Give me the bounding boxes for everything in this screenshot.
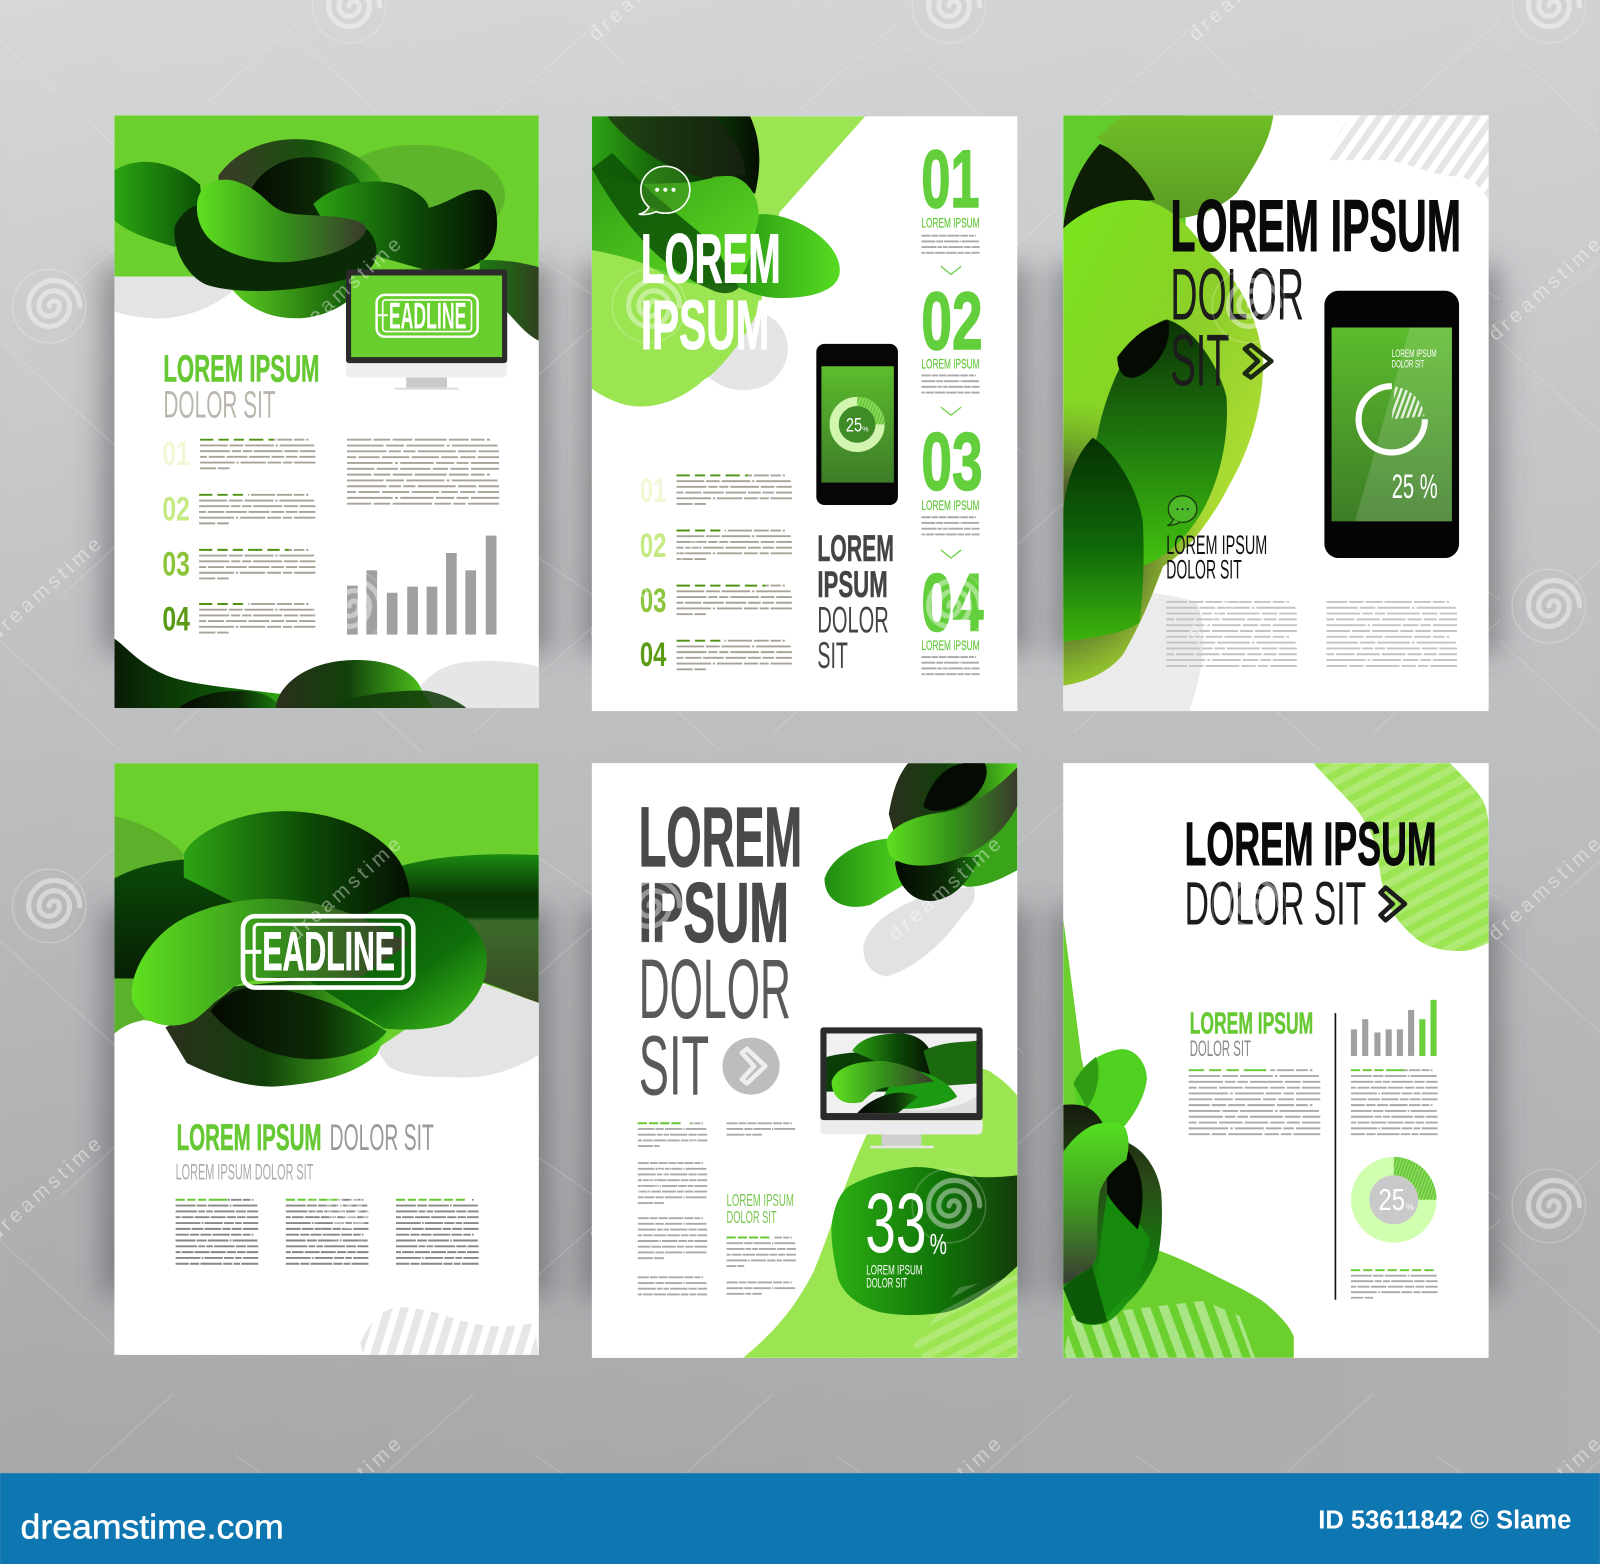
side heading: LOREM [817, 528, 894, 569]
phone with donut [816, 344, 898, 505]
numbered list: 04 [640, 636, 667, 674]
stat 33%: DOLOR SIT [866, 1276, 907, 1292]
heading: SIT [1170, 320, 1230, 402]
panel: brochure 2 top middle [592, 116, 1017, 711]
heading [639, 789, 802, 1113]
side heading: IPSUM [817, 564, 888, 605]
subheading and text: LOREM IPSUM [1190, 1006, 1313, 1040]
phone with donut: % [862, 426, 869, 434]
heading: SIT [639, 1018, 709, 1113]
numbered steps column: LOREM IPSUM [921, 356, 980, 372]
numbered list [162, 435, 315, 638]
side heading: DOLOR [817, 600, 889, 641]
panel: brochure 4 bottom left [114, 763, 539, 1355]
watermark: dreamstime [885, 833, 1005, 945]
panel: brochure 1 top left [114, 115, 539, 708]
panel: brochure 3 top right [1063, 115, 1489, 711]
numbered steps column: 03 [921, 417, 983, 508]
watermark: dreamstime [285, 234, 406, 345]
heading: DOLOR SIT [163, 383, 276, 425]
subheading: LOREM IPSUM [727, 1190, 794, 1210]
heading: LOREM [641, 220, 781, 298]
icon: arrow circle [722, 1038, 780, 1095]
three text columns [176, 1200, 479, 1264]
divider [1335, 1013, 1336, 1300]
numbered steps column: LOREM IPSUM [921, 216, 980, 232]
footer bar [0, 1473, 1600, 1564]
headline badge [377, 295, 478, 337]
phone with donut: 25 [846, 415, 862, 437]
numbered steps column [921, 134, 984, 674]
numbered list [640, 472, 792, 674]
numbered list: 01 [162, 435, 190, 473]
subheading and text: DOLOR SIT [1190, 1036, 1251, 1061]
numbered steps column: 02 [921, 276, 983, 367]
headline badge: EADLINE [389, 296, 466, 337]
side heading: SIT [817, 635, 848, 676]
text block [347, 440, 499, 504]
heading: DOLOR [639, 941, 791, 1036]
heading: LOREM IPSUM [177, 1117, 322, 1158]
numbered list: 03 [162, 545, 190, 583]
organic green artwork [114, 115, 539, 341]
heading [176, 1117, 434, 1184]
text columns [638, 1123, 796, 1294]
organic green artwork [592, 116, 865, 407]
text block [1351, 1070, 1438, 1134]
heading [163, 348, 319, 425]
heading: DOLOR SIT [1185, 869, 1366, 937]
footer credit: ID 53611842 © Slame [1318, 1506, 1571, 1534]
monitor with artwork [820, 1027, 983, 1148]
speech bubble and caption: DOLOR SIT [1166, 554, 1242, 584]
side heading [817, 528, 894, 676]
stat 33%: 33 [865, 1175, 927, 1270]
speech bubble and caption [1166, 496, 1267, 584]
donut chart: 25 [1378, 1183, 1405, 1217]
headline badge [243, 916, 413, 988]
organic green artwork [743, 763, 1017, 1358]
organic green artwork [114, 763, 539, 1087]
heading: IPSUM [639, 865, 789, 960]
numbered steps column: LOREM IPSUM [921, 638, 980, 654]
heading: DOLOR [1170, 253, 1304, 335]
decorative stripes [360, 1307, 539, 1355]
organic green artwork [1063, 763, 1489, 1358]
watermark: dreamstime [285, 833, 406, 945]
numbered list: 02 [162, 490, 190, 528]
numbered list: 02 [640, 527, 666, 565]
numbered list: 01 [640, 472, 666, 510]
speech bubble icon [639, 166, 690, 215]
donut chart [1360, 1157, 1437, 1233]
subheading: DOLOR SIT [727, 1207, 777, 1227]
numbered list: 03 [640, 582, 666, 620]
watermark: dreamstime [885, 1433, 1005, 1545]
phone with ring chart: 25 % [1392, 468, 1438, 506]
monitor with headline [346, 269, 507, 390]
heading: LOREM IPSUM DOLOR SIT [176, 1159, 313, 1184]
numbered list: 04 [162, 600, 190, 638]
stat 33%: % [930, 1229, 947, 1261]
watermark: dreamstime [585, 534, 705, 645]
watermark: dreamstime [1184, 1133, 1305, 1245]
bar chart [1351, 1000, 1437, 1056]
numbered steps column: 01 [921, 134, 980, 225]
text block [1351, 1270, 1438, 1298]
headline badge: EADLINE [262, 920, 395, 982]
heading: IPSUM [641, 286, 769, 364]
panel: brochure 5 bottom middle [592, 763, 1017, 1358]
heading [641, 220, 781, 364]
heading: LOREM [639, 789, 802, 884]
subheading [727, 1190, 794, 1227]
icon: chevron [1245, 345, 1271, 377]
footer logo: dreamstime.com [21, 1508, 284, 1546]
bottom waves [114, 639, 539, 708]
heading [1170, 185, 1461, 402]
stat 33%: LOREM IPSUM [866, 1262, 922, 1278]
phone with ring chart: DOLOR SIT [1392, 358, 1424, 370]
watermark: dreamstime [585, 1133, 705, 1245]
heading: DOLOR SIT [330, 1117, 434, 1158]
subheading and text [1189, 1006, 1320, 1134]
panel: brochure 6 bottom right [1063, 763, 1489, 1358]
phone with ring chart: LOREM IPSUM [1392, 348, 1437, 360]
icon: chevron [1381, 888, 1405, 920]
numbered steps column: 04 [921, 557, 984, 648]
bar chart [347, 536, 496, 635]
heading [1185, 810, 1437, 937]
text columns [1166, 602, 1457, 666]
watermark: dreamstime [285, 1433, 406, 1545]
organic green artwork [1063, 115, 1489, 711]
heading: LOREM IPSUM [163, 348, 319, 390]
phone with ring chart [1324, 291, 1459, 558]
donut chart: % [1406, 1202, 1414, 1212]
watermark: dreamstime [1184, 534, 1305, 645]
numbered steps column: LOREM IPSUM [921, 498, 980, 514]
speech bubble and caption: LOREM IPSUM [1166, 530, 1267, 560]
